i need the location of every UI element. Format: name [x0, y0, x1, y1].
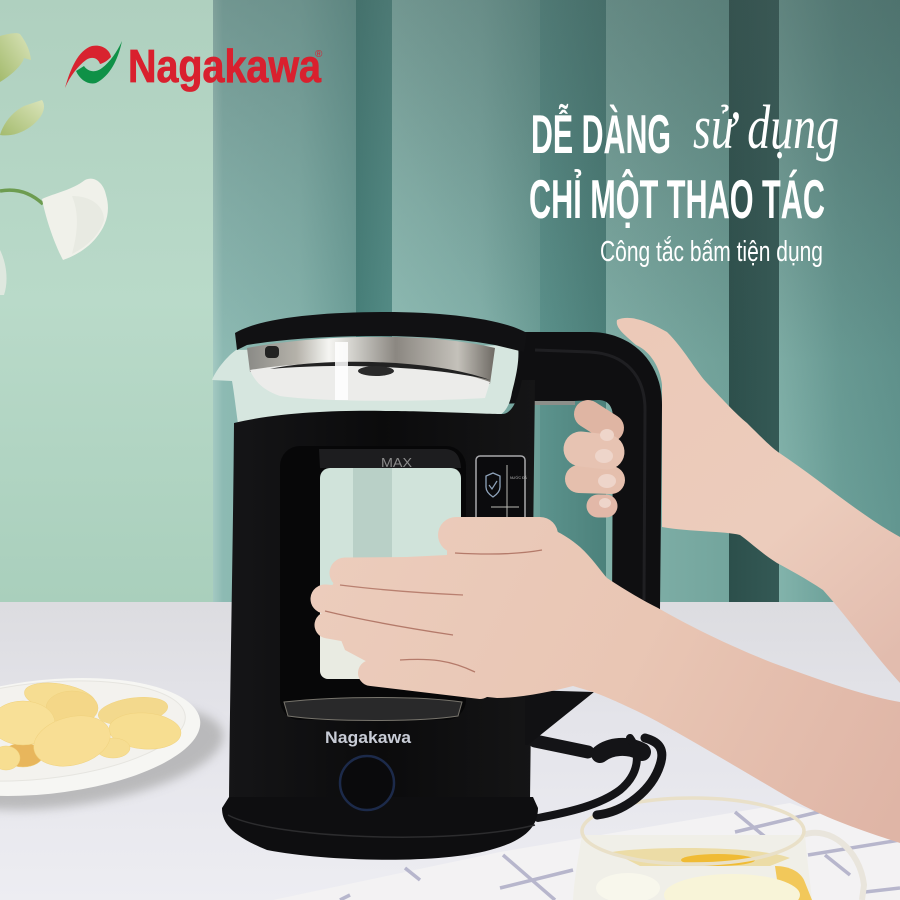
- background wall and curtain: [0, 0, 900, 602]
- lower hand: [325, 517, 900, 843]
- lemon slice: [664, 874, 800, 900]
- MAX mark: MAX: [381, 456, 413, 470]
- logo red swoosh: [65, 46, 111, 88]
- kettle handle: [500, 332, 662, 610]
- kettle body: [229, 380, 535, 800]
- finger one: [588, 414, 610, 428]
- cookies: [0, 678, 182, 774]
- power button: [340, 756, 394, 810]
- flower shade: [72, 196, 104, 254]
- cord plug: [600, 747, 642, 754]
- power cord: [535, 738, 662, 818]
- handle inner shade: [535, 350, 645, 600]
- cloth stripes: [340, 802, 900, 900]
- shield icon: [486, 473, 500, 497]
- brand logo: [65, 40, 323, 92]
- lid hinge dot: [265, 346, 279, 358]
- glass jug: [212, 345, 518, 424]
- lemon wedge: [596, 873, 660, 900]
- upper fingers: [579, 414, 611, 506]
- kettle base: [222, 797, 538, 860]
- cup body: [573, 835, 812, 900]
- lid knob reflection: [358, 366, 394, 376]
- headline: [529, 93, 839, 268]
- kettle: [212, 312, 662, 860]
- finger crease two: [325, 611, 453, 635]
- finger crease three: [400, 659, 475, 672]
- flower bud top: [0, 33, 31, 82]
- bright highlight: [335, 342, 348, 400]
- logo wordmark: Nagakawa: [128, 40, 321, 92]
- cord loop inner: [538, 738, 637, 818]
- plate with cookies: [0, 664, 231, 828]
- shield check: [489, 481, 497, 489]
- ring finger: [328, 625, 470, 650]
- cloth and glass cup: [273, 798, 900, 900]
- finger two: [581, 449, 607, 452]
- finger crease one: [340, 585, 463, 595]
- under-lid plate: [250, 363, 490, 401]
- cord loop outer: [597, 738, 662, 815]
- cup rim: [582, 798, 804, 864]
- plate inner: [0, 668, 190, 794]
- panel divider: [491, 465, 519, 520]
- index finger: [345, 572, 480, 573]
- checked cloth: [273, 803, 900, 900]
- script accent: sử dụng: [693, 93, 839, 163]
- base seam: [228, 815, 535, 837]
- subheading: Công tắc bấm tiện dụng: [600, 235, 823, 268]
- plate shadow: [0, 686, 231, 828]
- cup handle: [803, 833, 864, 900]
- table surface: [0, 602, 900, 900]
- white flower: [42, 179, 108, 260]
- finger four: [598, 494, 606, 518]
- plate: [0, 664, 206, 810]
- registered mark: ®: [315, 49, 323, 60]
- flower stem: [0, 190, 43, 204]
- middle finger: [325, 599, 470, 612]
- kettle lid: [235, 312, 527, 352]
- steel band: [247, 337, 495, 384]
- thumb crease: [455, 550, 542, 554]
- little finger: [371, 673, 480, 686]
- thumb: [456, 517, 540, 553]
- headline line one: DỄ DÀNG: [531, 103, 671, 165]
- window see-through: [320, 468, 461, 679]
- handle grey strip: [530, 401, 575, 405]
- dark reflection: [270, 362, 490, 380]
- viewing window frame: [280, 446, 466, 720]
- logo green swoosh: [76, 41, 122, 83]
- orange slice: [681, 854, 755, 866]
- flowers: [0, 33, 108, 295]
- cord strain relief: [535, 741, 588, 752]
- control panel: [476, 456, 528, 526]
- forearm and palm: [617, 318, 900, 683]
- partial white flower: [0, 250, 7, 295]
- finger three: [579, 479, 611, 480]
- finger nails: [595, 429, 616, 508]
- hand and forearm: [325, 517, 900, 843]
- tea band: [612, 848, 790, 866]
- window top reflection: [319, 449, 461, 468]
- upper hand: [579, 318, 900, 683]
- window bottom glass: [284, 698, 462, 720]
- lemon right: [775, 866, 812, 900]
- kettle lower handle wedge: [525, 690, 594, 745]
- kettle brand: Nagakawa: [325, 728, 412, 747]
- lower fingers: [325, 535, 540, 686]
- flower bud middle: [0, 100, 44, 135]
- panel caption: NƯỚC ĐÃ: [510, 475, 528, 480]
